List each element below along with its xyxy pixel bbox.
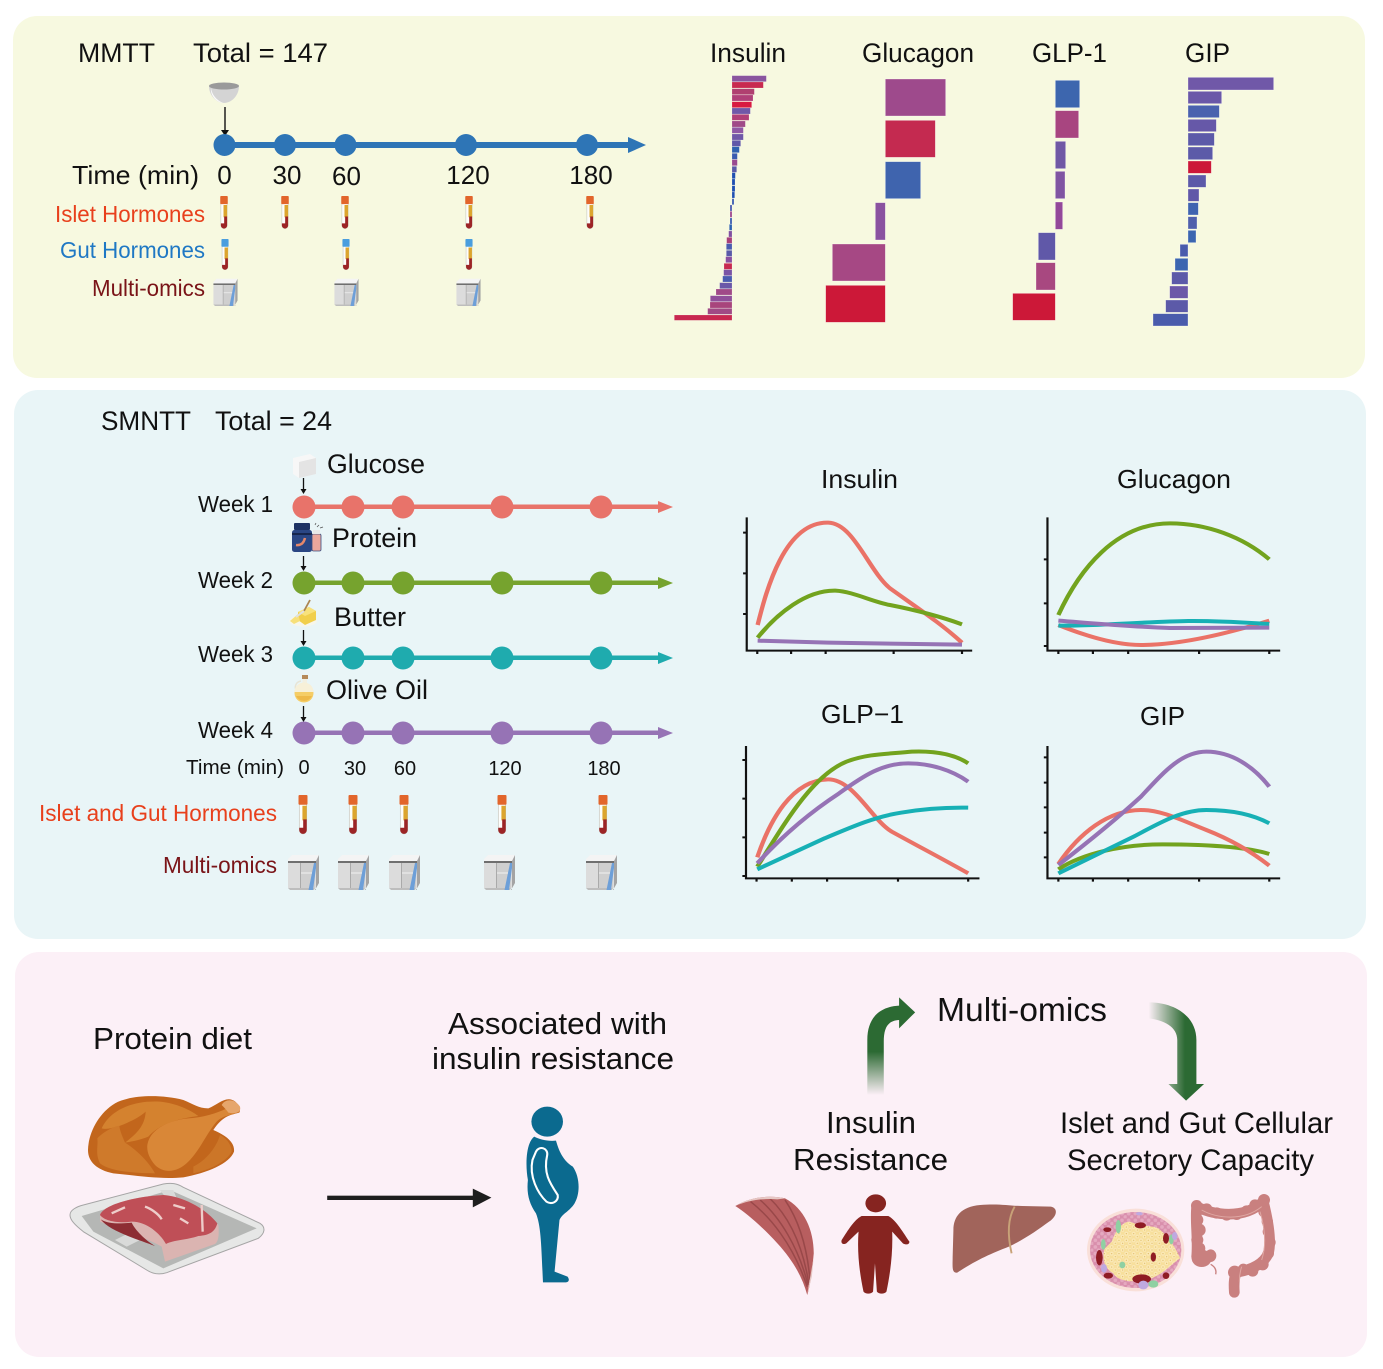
timeline: week 1 bbox=[292, 496, 673, 518]
row labels: weeks: Week 2 bbox=[198, 567, 273, 593]
icons: hormone tubes bbox=[299, 795, 607, 834]
icons: multi-omics machines bbox=[213, 279, 481, 306]
arrow: multi-omics to secretory capacity bbox=[1149, 1002, 1204, 1101]
axis labels: time: 120 bbox=[446, 160, 490, 190]
row labels: weeks: Week 4 bbox=[198, 717, 273, 743]
axis labels: time: 60 bbox=[394, 758, 416, 780]
heading: MMTT total: MMTT bbox=[78, 38, 155, 68]
axis labels: time: 0 bbox=[217, 160, 232, 190]
icon: person with obesity, blue bbox=[526, 1107, 579, 1282]
bar chart: insulin bbox=[674, 76, 766, 320]
line chart: glucagon bbox=[1044, 517, 1280, 654]
icon: pancreatic islet bbox=[1087, 1209, 1184, 1291]
panel: MMTT bbox=[13, 16, 1365, 378]
line chart: GIP bbox=[1044, 746, 1280, 882]
chart titles: GIP bbox=[1140, 701, 1185, 731]
row label: Gut Hormones: Gut Hormones bbox=[60, 237, 205, 263]
heading: Islet and Gut Cellular Secretory Capacity bbox=[1060, 1107, 1333, 1177]
heading: Protein diet: Protein diet bbox=[93, 1021, 252, 1056]
arrow: meal to time zero bbox=[221, 107, 229, 136]
axis labels: time: 60 bbox=[332, 161, 361, 191]
timeline: week 2 bbox=[292, 572, 673, 594]
row labels: weeks bbox=[198, 491, 273, 743]
heading: Associated with insulin resistance: Associated with bbox=[448, 1006, 667, 1041]
bar chart: GIP bbox=[1153, 77, 1274, 326]
label: Glucose: Glucose bbox=[327, 449, 425, 479]
line chart: insulin bbox=[743, 517, 972, 654]
heading: MMTT total bbox=[78, 38, 328, 68]
chart titles: hormone bars bbox=[710, 38, 1230, 68]
axis labels: time: 120 bbox=[488, 758, 522, 780]
axis labels: time: Time (min) bbox=[72, 160, 199, 190]
icon: roast chicken bbox=[88, 1096, 240, 1178]
icon: butter bbox=[289, 600, 317, 626]
chart titles: GLP−1 bbox=[821, 699, 904, 729]
panel: conclusions bbox=[15, 952, 1367, 1357]
row label: Multi-omics: Multi-omics bbox=[163, 852, 277, 878]
arrows: diet to timeline bbox=[300, 478, 306, 722]
timeline: week 4 bbox=[292, 722, 673, 744]
row label: Islet Hormones: Islet Hormones bbox=[55, 201, 205, 227]
icons: islet hormone tubes bbox=[220, 196, 594, 229]
axis labels: time: 180 bbox=[569, 160, 613, 190]
chart titles: Glucagon bbox=[1117, 464, 1231, 494]
row label: Multi-omics: Multi-omics bbox=[92, 275, 205, 301]
icon: muscle bbox=[735, 1197, 814, 1295]
arrow: insulin resistance to multi-omics bbox=[867, 997, 915, 1096]
icon: protein jar bbox=[292, 523, 323, 552]
heading: MMTT total: Total = 147 bbox=[193, 38, 328, 68]
heading: Insulin Resistance: Insulin bbox=[826, 1105, 916, 1140]
heading: Insulin Resistance bbox=[793, 1105, 948, 1177]
bar chart: glucagon bbox=[826, 79, 946, 322]
heading: Insulin Resistance: Resistance bbox=[793, 1142, 948, 1177]
icon: glucose cube bbox=[293, 454, 316, 478]
heading: SMNTT total: SMNTT bbox=[101, 406, 191, 436]
line chart: GLP-1 bbox=[742, 746, 979, 882]
heading: SMNTT total: Total = 24 bbox=[215, 406, 332, 436]
icons: gut hormone tubes bbox=[221, 239, 473, 270]
chart titles: hormone bars: GIP bbox=[1185, 38, 1230, 68]
heading: Islet and Gut Cellular Secretory Capacity: Islet and Gut Cellular bbox=[1060, 1107, 1333, 1140]
timeline: MMTT bbox=[214, 134, 646, 156]
panel: SMNTT bbox=[14, 390, 1366, 939]
arrow: diet to insulin resistance bbox=[327, 1189, 491, 1207]
axis labels: time: 30 bbox=[344, 758, 366, 780]
row labels: weeks: Week 3 bbox=[198, 641, 273, 667]
heading: SMNTT total bbox=[101, 406, 332, 436]
icon: colon bbox=[1191, 1194, 1276, 1293]
chart titles: Insulin bbox=[821, 464, 898, 494]
icons: multi-omics machines bbox=[288, 855, 617, 890]
label: Protein: Protein bbox=[332, 523, 417, 553]
label: Olive Oil: Olive Oil bbox=[326, 675, 428, 705]
icon: person with obesity, dark red bbox=[841, 1194, 909, 1294]
axis labels: time: 0 bbox=[298, 757, 310, 779]
axis labels: time bbox=[186, 757, 621, 780]
chart titles: hormone bars: Insulin bbox=[710, 38, 786, 68]
chart titles: hormone bars: Glucagon bbox=[862, 38, 974, 68]
row labels: weeks: Week 1 bbox=[198, 491, 273, 517]
timeline: week 3 bbox=[292, 646, 673, 670]
icon: packaged meat bbox=[70, 1183, 264, 1274]
label: Butter: Butter bbox=[334, 602, 406, 632]
icon: olive oil bbox=[294, 675, 314, 702]
heading: Associated with insulin resistance bbox=[432, 1006, 674, 1076]
axis labels: time: Time (min) bbox=[186, 757, 284, 779]
icon: liver bbox=[953, 1204, 1056, 1273]
row label: Islet and Gut Hormones: Islet and Gut Hormones bbox=[39, 800, 277, 826]
heading: Islet and Gut Cellular Secretory Capacity: Secretory Capacity bbox=[1067, 1144, 1314, 1177]
heading: Multi-omics: Multi-omics bbox=[937, 991, 1107, 1028]
chart titles: hormone bars: GLP-1 bbox=[1032, 38, 1107, 68]
axis labels: time: 30 bbox=[273, 160, 301, 190]
heading: Associated with insulin resistance: insulin resistance bbox=[432, 1041, 674, 1076]
axis labels: time bbox=[72, 160, 613, 191]
icon: bowl bbox=[209, 82, 239, 103]
axis labels: time: 180 bbox=[587, 758, 621, 780]
chart titles bbox=[821, 464, 1231, 731]
bar chart: GLP-1 bbox=[1013, 80, 1080, 320]
